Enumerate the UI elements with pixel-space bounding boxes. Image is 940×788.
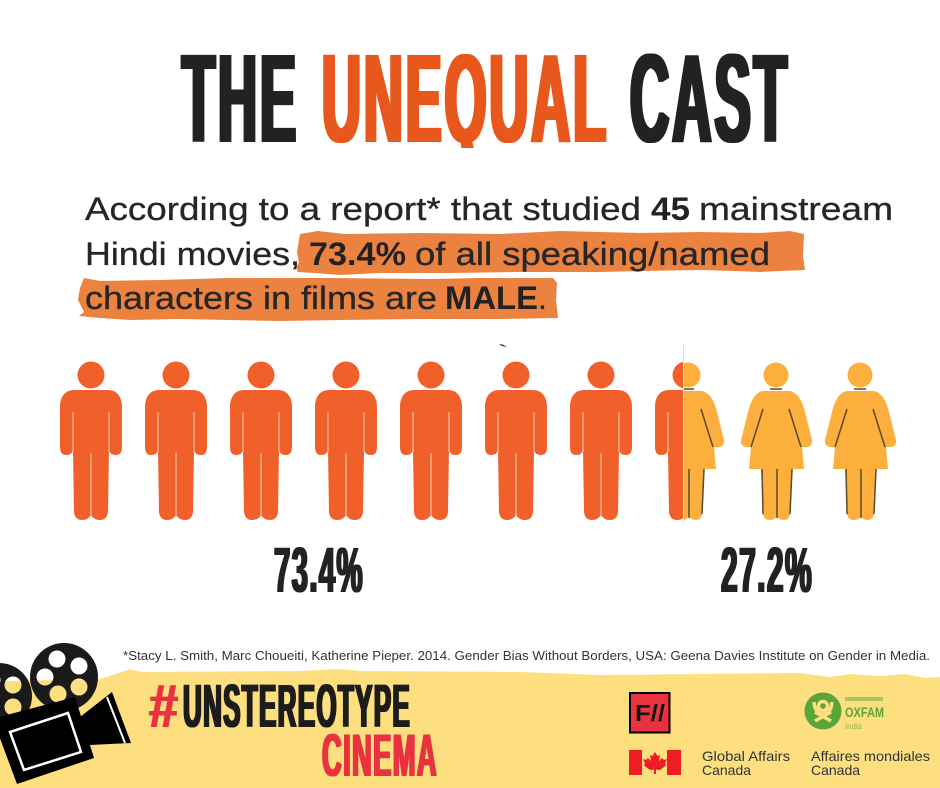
highlight: line three brush stroke <box>78 278 558 321</box>
footnote: *Stacy L. Smith, Marc Choueiti, Katherine Pieper. 2014. Gender Bias Without Borders, USA: Geena Davies Institute on Gender in Media. <box>123 648 930 663</box>
intro text: According to a report* that studied <box>85 191 641 227</box>
title: THE <box>182 28 299 169</box>
text: 73.4% <box>274 534 364 606</box>
logo: F// <box>630 693 670 732</box>
intro text <box>85 191 893 316</box>
highlight: line two brush stroke <box>296 231 805 275</box>
male figures <box>60 362 717 520</box>
logo: Oxfam India: OXFAM <box>845 704 884 720</box>
text: UNSTEREOTYPE <box>183 672 411 740</box>
logo text: Global Affairs Canada: Global Affairs <box>702 748 790 764</box>
logo: F//: F// <box>635 700 666 726</box>
text: 27.2% <box>721 534 813 606</box>
female figures <box>684 362 896 520</box>
logo text: Affaires mondiales: Affaires mondiales <box>811 748 930 764</box>
intro text: characters in films are <box>85 280 437 316</box>
title <box>180 54 788 148</box>
intro text: 73.4% <box>309 236 406 272</box>
text: CINEMA <box>322 722 438 788</box>
intro text: . <box>538 280 547 316</box>
logo: Oxfam India: India <box>845 722 863 731</box>
intro text: 45 <box>651 191 690 227</box>
icon: film camera <box>0 640 131 784</box>
intro text: of all speaking/named <box>415 236 770 272</box>
campaign hashtag: # <box>149 672 178 740</box>
footer band <box>0 669 940 788</box>
logo: Oxfam India <box>804 692 884 731</box>
intro text: MALE <box>445 280 538 316</box>
logo text: Canada: Canada <box>702 762 751 778</box>
campaign hashtag <box>149 672 438 788</box>
intro text: mainstream <box>699 191 893 227</box>
logo: Canada flag <box>629 750 681 775</box>
intro text: Hindi movies, <box>85 236 300 272</box>
logo text: Canada (French): Canada <box>811 762 860 778</box>
pictogram: gender ratio of characters <box>60 344 896 523</box>
